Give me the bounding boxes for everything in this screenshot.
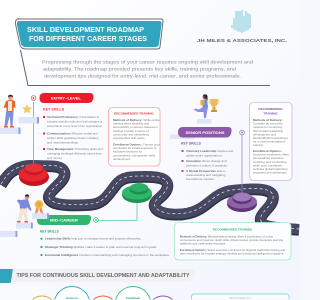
key skills: entry-level: [43, 108, 103, 160]
recommended training: mid-career: RECOMMENDED TRAINING: [213, 228, 253, 232]
logo: JH Miles and Associates: JH MILES & ASSOCIATES, INC.: [197, 38, 287, 44]
recommended training: entry-level: Enrollment Options: Choose your: [113, 142, 160, 146]
connector: senior pin: [240, 130, 244, 195]
key skills: senior: understanding and navigating: [186, 173, 226, 177]
recommended training: entry-level: settings provide a sense of: [113, 129, 149, 133]
key skills: entry-level: Communication: Effective verbal and: [47, 132, 98, 136]
key skills: mid-career: Emotional Intelligence involves understanding and managing emotions in the workplace.: [45, 253, 170, 257]
tip circle: purple: [154, 296, 172, 300]
heading pill: mid-career: MID–CAREER: [50, 219, 78, 223]
tip circle: network: Network: [66, 296, 78, 300]
recommended training: senior: blended/hybrid workshops: [253, 136, 288, 140]
key skills: entry-level: essential at every level of an organization.: [47, 124, 103, 128]
recommended training: senior: programs and workshops.: [253, 171, 288, 175]
recommended training: senior: coaching and mentorship,: [253, 160, 288, 164]
intro text block with frame: Progressing through the stages of your career requires ongoing skill development and: [42, 60, 253, 64]
recommended training: entry-level: RECOMMENDED TRAINING: [114, 112, 154, 116]
tip circle: feedback: Feedback: [126, 296, 140, 300]
intro text block with frame: [20, 50, 270, 86]
key skills: senior: KEY SKILLS: [181, 142, 202, 146]
key skills: entry-level: and misunderstandings.: [47, 140, 79, 144]
recommended training: entry-level: exclusive sessions for: [113, 150, 142, 154]
recommended training: senior: Enrollment Options:: [253, 149, 282, 153]
intro text block with frame: adaptability. The roadmap provided presents key skills, training programs, and: [43, 66, 236, 72]
recommended training: mid-career: platforms and multimedia resources.: [180, 242, 226, 246]
recommended training: entry-level: community and networking: [113, 132, 149, 136]
recommended training: senior: development and: [253, 132, 276, 136]
heading pill: entry-level: ENTRY–LEVEL: [51, 97, 82, 101]
logo: JH Miles and Associates: [197, 10, 287, 44]
recommended training: mid-career: Enrollment Options: Select executive enrollment for targeted leadership training and: [180, 248, 285, 252]
milestone button: green: [122, 183, 152, 203]
tips circles: [33, 287, 172, 300]
key skills: senior: guides entire organizations.: [186, 154, 223, 158]
recommended training: entry-level: [108, 108, 160, 166]
heading pill: mid-career: [37, 215, 91, 225]
recommended training: entry-level: enrollment for broad exposure or: [113, 146, 157, 150]
recommended training: entry-level: personalized, role-specific skills: [113, 153, 156, 157]
key skills: entry-level: industry-specific tools and technologies is: [47, 120, 103, 124]
key skills: senior: Innovation drives change and: [186, 159, 227, 163]
recommended training: senior: high-impact leadership: [253, 129, 284, 133]
recommended training: mid-career: [174, 222, 291, 260]
key skills: entry-level: KEY SKILLS: [43, 108, 65, 112]
title banner: FOR DIFFERENT CAREER STAGES: [29, 36, 147, 43]
recommended training: senior: network for mentoring,: [253, 125, 283, 129]
key skills: mid-career: Strategic Thinking Abilities make it easier to plan and execute long-term goals.: [45, 245, 157, 249]
key skills: entry-level: Technical Proficiency: A foundation in: [47, 115, 99, 119]
intro text block with frame: development tips designed for entry-level, mid-career, and senior professionals.: [44, 74, 241, 78]
senior positions section: [170, 94, 292, 212]
tip circle: orange: [94, 296, 112, 300]
key skills: entry-level: and money.: [47, 156, 63, 160]
recommended training: senior: for a more personalized: [253, 140, 285, 144]
recommended training: mid-career: convenience and in-person depth while virtual courses provide interactive learning: [180, 238, 283, 242]
entry-level section: [0, 93, 160, 186]
key skills: senior: Visionary Leadership inspires and: [186, 149, 234, 153]
key skills: mid-career: Leadership Skills help you to manage teams and projects effectively.: [45, 237, 141, 241]
key skills: mid-career: [40, 230, 170, 257]
recommended training: senior: Consider an executive: [253, 122, 283, 126]
key skills: entry-level: written skills guarantee fewer mistakes: [47, 136, 99, 140]
steps and person: entry-level: [0, 95, 39, 134]
title banner: [15, 18, 163, 49]
recommended training: senior: training.: [253, 143, 264, 147]
recommended training: senior: [250, 102, 292, 180]
mid-career section: [0, 183, 291, 260]
steps, person and medal: mid-career: [0, 194, 49, 237]
key skills: senior: international markets.: [186, 177, 215, 181]
key skills: mid-career: KEY SKILLS: [40, 230, 59, 234]
adaptability tip card: ADAPTABILITY: [229, 296, 251, 300]
key skills: entry-level: managing workload efficiently saves time: [47, 152, 102, 156]
recommended training: senior: Methods of Delivery:: [253, 118, 283, 122]
milestone button: purple: [227, 192, 257, 212]
heading pill: senior positions: SENIOR POSITIONS: [186, 131, 225, 135]
key skills: senior: A Global Perspective aids in: [186, 169, 226, 173]
title banner: SKILL DEVELOPMENT ROADMAP: [27, 27, 144, 34]
key skills: senior: promotes a culture of creativity.: [186, 164, 228, 168]
tip circle: gold: [33, 296, 51, 300]
connector: entry-level pin: [31, 96, 36, 170]
connector: mid-career pin: [94, 197, 137, 222]
recommended training: senior: includes global leadership: [253, 167, 288, 171]
recommended training: entry-level: accessibility, in-person classroom: [113, 125, 158, 129]
winding road: [1, 165, 299, 230]
recommended training: senior: RECOMMENDED: [258, 107, 283, 111]
recommended training: entry-level: training offers flexibility and: [113, 122, 149, 126]
heading pill: entry-level: [40, 93, 94, 103]
recommended training: senior: TRAINING: [263, 112, 278, 116]
recommended training: senior: personalized executive: [253, 156, 284, 160]
recommended training: mid-career: open enrollment for broader strategic thinking and emotional intelligence programs.: [180, 252, 284, 256]
recommended training: senior: Exclusive enrollment offers: [253, 153, 289, 157]
recommended training: entry-level: opportunities with peers.: [113, 136, 146, 140]
adaptability tip card: [192, 294, 289, 300]
recommended training: senior: while open enrollment: [253, 163, 282, 167]
key skills: entry-level: Time Management: Prioritizing tasks and: [47, 147, 103, 151]
recommended training: entry-level: Methods of Delivery: While online: [113, 118, 160, 122]
tips section heading: TIPS FOR CONTINUOUS SKILL DEVELOPMENT AND ADAPTABILITY: [16, 273, 190, 279]
tips section heading: [0, 269, 195, 283]
key skills: senior: [181, 142, 234, 181]
steps, person and trophy: senior: [194, 94, 219, 124]
recommended training: mid-career: Methods of Delivery: Blended/hybrid training offers a combination of online: [180, 234, 273, 238]
recommended training: entry-level: development.: [113, 157, 131, 161]
milestone button: red: [18, 164, 49, 186]
